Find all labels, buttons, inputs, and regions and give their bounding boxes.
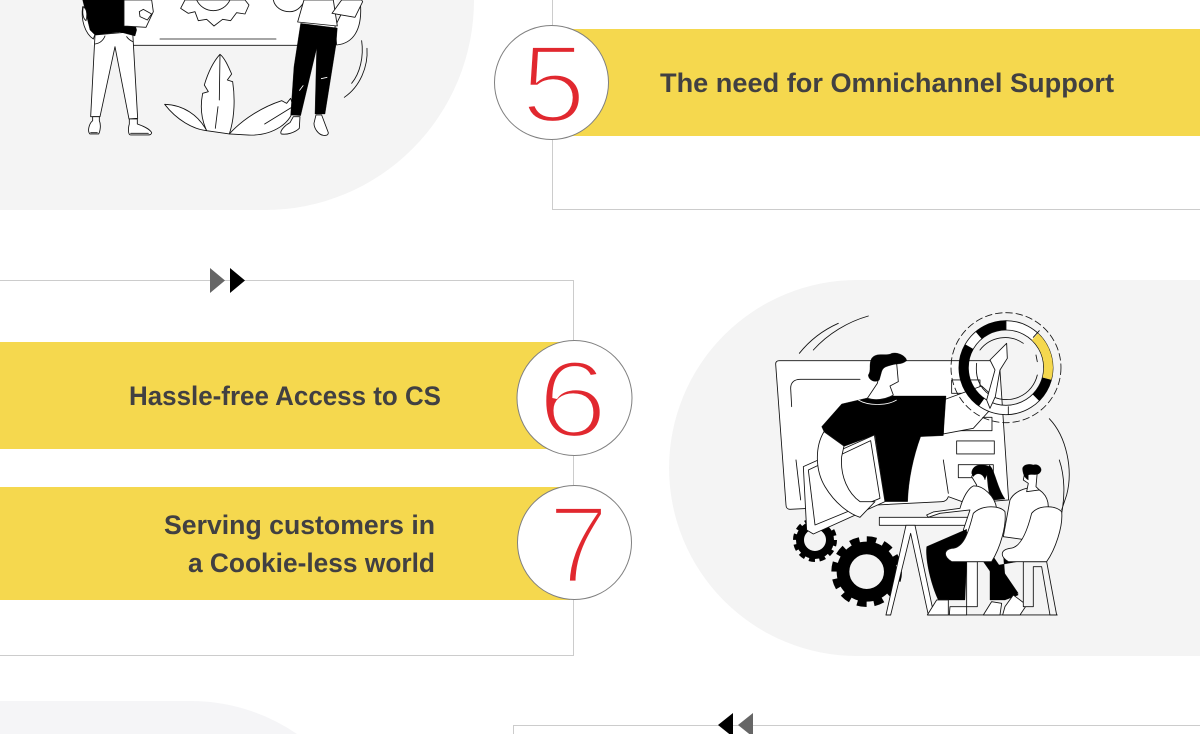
- desk: [879, 517, 970, 615]
- motion lines: [799, 316, 868, 353]
- banner: challenge 5: [570, 29, 1200, 136]
- panel: top left illustration background: [0, 0, 474, 210]
- board: [92, 0, 337, 45]
- gears: [795, 520, 898, 603]
- board gear: [181, 0, 249, 26]
- number badge 6: [517, 339, 632, 461]
- arrows: backward: [718, 713, 753, 734]
- number badge 7: [518, 484, 632, 607]
- heading: challenge 7: Serving customers in: [164, 510, 435, 540]
- number badge 5: 5: [521, 23, 586, 146]
- left person: [82, 0, 153, 135]
- panel: challenges 6 and 7 frame: [0, 280, 574, 656]
- illustration: presenter with data ring and two seated people: [776, 313, 1069, 615]
- heading: challenge 6: Hassle-free Access to CS: [129, 381, 441, 411]
- yellow band: [570, 29, 1200, 136]
- number badge 7: 7: [549, 484, 608, 607]
- yellow band: [0, 342, 570, 449]
- banner: challenge 7: [0, 487, 570, 600]
- right person: [281, 0, 367, 135]
- heading: challenge 5: The need for Omnichannel Support: [660, 68, 1114, 98]
- panel: challenge 5 frame: [552, 0, 1200, 210]
- plant leaves: [165, 54, 293, 135]
- heading: challenge 7: a Cookie-less world: [188, 548, 435, 578]
- panel: bottom right frame: [514, 726, 1200, 734]
- presenter t-shirt: [822, 396, 946, 502]
- number badge 6: 6: [537, 339, 608, 461]
- presenter outstretched arm: [943, 386, 993, 434]
- presenter left arm: [817, 432, 875, 517]
- arrows: forward: [210, 268, 245, 293]
- floor line: [886, 614, 1057, 616]
- tablet: [803, 435, 885, 534]
- seated man: [990, 464, 1062, 615]
- banner: challenge 6: [0, 342, 570, 449]
- panel: bottom left illustration background: [0, 701, 297, 734]
- data ring: [951, 313, 1061, 423]
- presenter hand: [987, 343, 1007, 408]
- panel: right illustration background: [669, 280, 1200, 656]
- presenter head: [867, 353, 907, 400]
- number badge 5: [494, 23, 608, 146]
- yellow band: [0, 487, 570, 600]
- illustration: two people with a board and plants: [82, 0, 367, 135]
- seated woman: [926, 465, 1018, 615]
- board: [776, 361, 1009, 509]
- heading: challenge 7: [164, 510, 435, 578]
